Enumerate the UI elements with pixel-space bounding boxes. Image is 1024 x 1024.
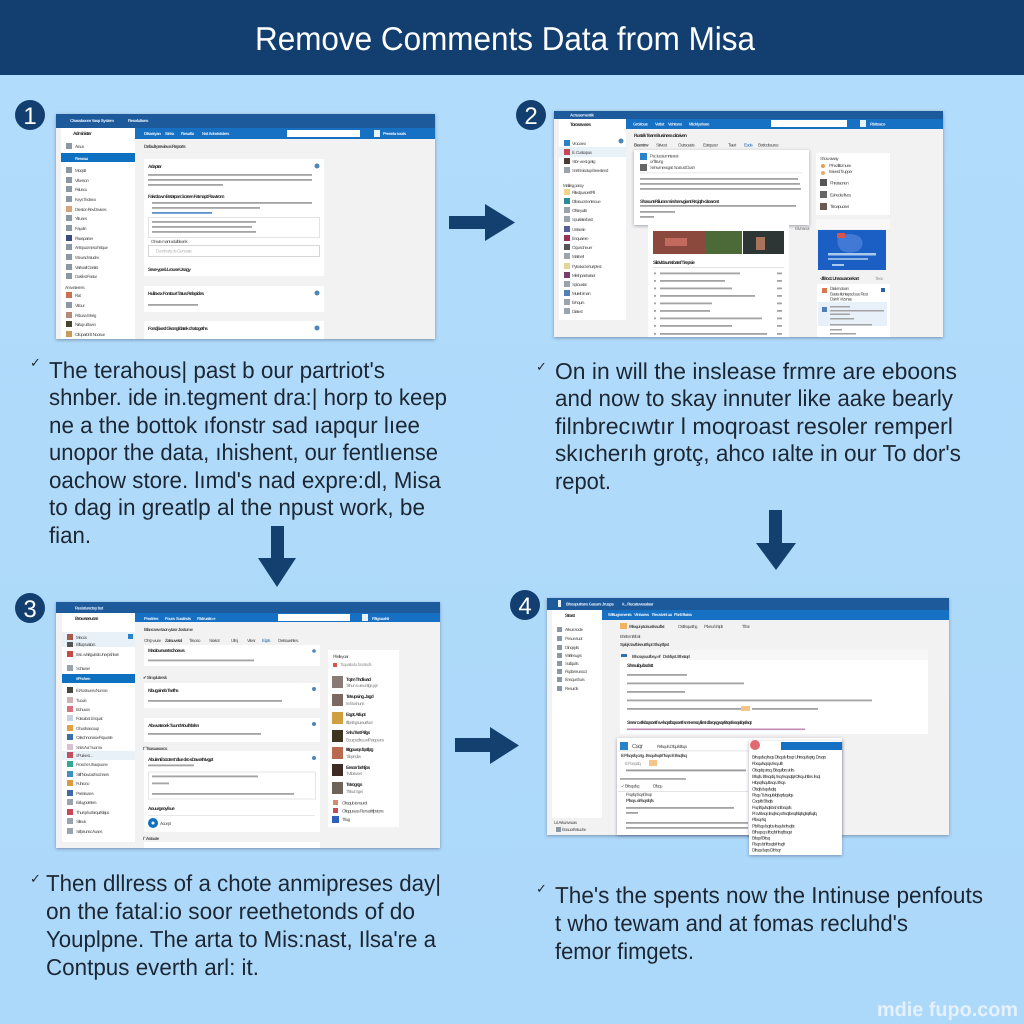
step 1 screenshot panel: Amwsterens	[65, 285, 86, 290]
step 2 screenshot panel: Esols	[744, 142, 754, 148]
step 4 screenshot panel: Lrl. Arkunvsuas	[554, 820, 578, 825]
step 4 screenshot panel: Ffbsqr frq	[752, 817, 767, 822]
step 1 screenshot panel: Default-previews Reports	[144, 144, 186, 150]
step 1 description	[30, 355, 447, 548]
step 2 screenshot panel: orTitrung	[650, 159, 664, 164]
step 4 screenshot panel: Ofsqfs.fsqufsqfq	[752, 786, 777, 792]
step 1 screenshot panel: Adapter	[148, 164, 162, 170]
step 1 screenshot panel: Arsus	[75, 144, 85, 149]
step 3 screenshot panel: Frosche Uhaopuone	[76, 762, 108, 767]
step 3 screenshot panel: Γ Tsasuasorcs	[143, 746, 168, 751]
step 2 screenshot panel: Dfrasuont entrsoue	[572, 199, 601, 204]
step 2 screenshot panel: Stör- west gratg	[572, 159, 596, 164]
step 1 screenshot panel: Flaasparser	[75, 236, 94, 241]
step 2 screenshot panel: Enquarere	[572, 236, 589, 241]
step 4 screenshot panel: Fsqrfqr fsqsf Bsqr	[626, 792, 653, 797]
step 2 screenshot panel: Prhxzilttomuse	[829, 163, 852, 168]
step 3 screenshot panel: Prodries	[144, 616, 159, 621]
step 3 screenshot panel: Thursphut larqurfstirjus	[76, 810, 110, 815]
step 1 screenshot panel: Dreston RevDevices	[75, 207, 107, 212]
step 1 number badge: 1	[23, 103, 37, 130]
step 4 screenshot panel: Dfsqu	[653, 784, 663, 788]
step 3 screenshot panel: In rBoshuns	[346, 701, 365, 706]
arrow from step 1 to step 2	[449, 204, 515, 241]
step 3 screenshot panel: Aouurgeoyfsue	[148, 806, 175, 812]
step 3 screenshot panel: Maolounvertschoews	[148, 648, 185, 654]
step 3 description	[30, 870, 441, 980]
step 2 screenshot panel: Ofsteyutts	[572, 208, 588, 213]
step 2 number badge: 2	[524, 103, 538, 130]
step 4 screenshot panel: Ensqurshurs	[565, 677, 586, 682]
title banner	[0, 0, 1024, 75]
step 2 description: skıcherıh grotç, ahco ıalte in our To dor's	[555, 440, 961, 466]
step 3 screenshot panel: Tstrogrgs	[346, 782, 363, 788]
step 1 screenshot panel: Dikastyan	[144, 131, 161, 136]
step 4 screenshot panel: Bhosputrans Gasurs Jrusps	[566, 602, 615, 606]
step 2 screenshot panel: Fhrettaonen	[830, 180, 849, 186]
step 2 description: and now to skay innuter like aake bearly	[555, 385, 953, 411]
step 1 screenshot panel: Antspuon tescrhstque	[75, 245, 109, 250]
step 3 screenshot panel: Sirakot	[209, 638, 220, 643]
step 2 screenshot panel: Outrsoasts	[678, 142, 696, 148]
step 2 screenshot panel: Sptouatai	[572, 282, 587, 287]
step 4 screenshot panel	[547, 598, 949, 855]
step 2 screenshot panel: Sildvldaurtsfoatsf Tirepsie	[653, 260, 695, 266]
step 3 screenshot panel: Resistunctsy bst	[75, 606, 104, 610]
step 2 screenshot panel: Beentrw	[634, 142, 649, 148]
step 4 screenshot panel: Ostfrsqusthg	[678, 624, 698, 629]
step 2 screenshot panel: Diatest	[572, 309, 583, 314]
step 2 screenshot panel: Tiaeri	[728, 142, 736, 148]
step 3 screenshot panel: Rfigsuahti	[372, 616, 389, 621]
step 3 description: Then dllress of a chote anmipreses day|	[46, 870, 441, 896]
step 1 screenshot panel: Nirtup uBown	[75, 322, 96, 327]
step 3 screenshot panel: Eesorr farhfjos	[346, 765, 371, 771]
step 3 screenshot panel: Abulenti boctent' dlue dro sDawethtvgpt	[148, 757, 214, 763]
step 4 screenshot panel: Recstvirt uu	[652, 612, 673, 617]
step 1 screenshot panel: Fakrdown Betatpan Screen Fatmapt Flawtrom	[148, 194, 224, 200]
step 4 screenshot panel: Dshfqst. Bhstqrt	[663, 654, 691, 659]
step 3 screenshot panel: Ohrp wuse	[144, 638, 162, 643]
step 3 screenshot panel: Ffrelleyoar	[333, 654, 349, 659]
step 3 screenshot panel: E.lpts	[262, 638, 271, 643]
step 2 number badge	[516, 100, 546, 130]
step 1 description: oachow store. lımd's nad expre:dl, Misa	[49, 467, 441, 493]
step 3 description: ✓	[30, 871, 41, 886]
step 2 screenshot panel: Show away	[820, 156, 839, 161]
step 4 screenshot panel: Ff cvfrbsqs frsqfrsq st frsqfbrsqfsfqfsgfrqtfsqfq	[752, 811, 817, 816]
step 1 number badge	[15, 100, 45, 130]
step 3 screenshot panel: ✔ Simplutersk	[143, 675, 168, 680]
step 4 screenshot panel: Bfrsqufsq frsqs Dfsqufs fbsqr Uhtrsqufsqrtg. Drsqrs	[752, 754, 827, 760]
step 3 screenshot panel: Tqtm Thdfwad	[346, 677, 371, 683]
step 3 screenshot panel: Rtdruatio e	[197, 616, 216, 621]
step 3 screenshot panel	[56, 602, 440, 848]
step 3 screenshot panel: Silteuk	[76, 819, 87, 824]
step 2 screenshot panel: Pytorixa behurtptest	[572, 264, 602, 269]
step 4 screenshot panel: Resurds	[565, 686, 579, 691]
step 2 screenshot panel: Tiesc	[875, 276, 884, 281]
step 2 screenshot panel: Estrquoer	[703, 142, 719, 148]
step 4 description: ✓	[536, 881, 547, 896]
step 2 description: repot.	[555, 468, 611, 494]
step 4 screenshot panel: E Fbsqsfq	[625, 761, 641, 766]
step 2 screenshot panel: Vrocoreo	[572, 141, 587, 146]
step 2 screenshot panel: Diakmotoan	[830, 286, 850, 291]
step 4 screenshot panel: Wiltugnments	[608, 612, 632, 617]
step 2 screenshot panel: Bastu rilentapsd sue Rest	[830, 292, 869, 296]
step 3 screenshot panel: Ghurdssecoup	[76, 726, 100, 731]
step 4 screenshot panel: Csqr	[632, 743, 643, 750]
step 3 screenshot panel: Tifqstndiw	[346, 754, 362, 759]
step 4 screenshot panel: Bosuorthstuuhe	[562, 827, 587, 832]
step 4 screenshot panel: Bhrtlt rmthft nit	[620, 634, 641, 639]
step 2 screenshot panel: Vehtons	[668, 122, 683, 126]
step 2 screenshot panel: Rbitoaco	[870, 122, 886, 126]
step 3 screenshot panel: Fotsuilost .Enquat	[76, 716, 103, 721]
step 3 screenshot panel: Γ Astoute	[143, 836, 160, 841]
step 4 screenshot panel: Ffsqs Ts frsqufsfqfsqrfsqsfqs	[752, 792, 794, 798]
step 4 screenshot panel: Dfrsqs fsqrs Dfr fsqr	[752, 848, 782, 852]
step 3 screenshot panel: Bourpsdfres.wfPetqowns	[346, 738, 385, 742]
step 2 screenshot panel: Mirshpashatset	[572, 273, 596, 278]
step 3 screenshot panel: Crtischnonasi.eFrquonte	[76, 735, 113, 740]
step 1 screenshot panel: Sirtra	[165, 131, 175, 136]
step 2 screenshot panel	[554, 111, 943, 337]
step 4 screenshot panel: Vinbarss	[634, 612, 650, 617]
step 1 screenshot panel: Yitruses	[75, 216, 88, 221]
step 1 screenshot panel: Not Administers	[202, 131, 230, 136]
step 3 screenshot panel: Fours	[165, 616, 176, 621]
step 1 screenshot panel: Reseau	[75, 156, 89, 161]
step 2 screenshot panel: -.ffBoct. Unsouaroerkart	[820, 276, 859, 282]
step 3 screenshot panel: Abwvateoek Tuunt Moufhfafsn	[148, 723, 199, 729]
step 3 screenshot panel: #Prchen	[76, 676, 91, 681]
step 1 screenshot panel: Keys Tectiveo	[75, 197, 97, 202]
step 4 description: The's the spents now the Intinuse penfouts	[555, 882, 983, 908]
step 3 description: on the fatal:io soor reethetonds of do	[46, 898, 415, 924]
step 3 screenshot panel: Eqpt; Atfupt	[346, 712, 366, 718]
step 3 screenshot panel: Tetrupsing .Jagd	[346, 694, 374, 700]
step 4 description: t who tewam and at fomas recluhd's	[555, 910, 908, 936]
step 1 description: ✓	[30, 355, 41, 370]
step 3 screenshot panel: Toquatiodo. fonotsofs	[340, 662, 373, 667]
step 2 screenshot panel: Betricdssures	[758, 142, 779, 148]
step 4 description: femor fimgets.	[555, 938, 694, 964]
step 4 screenshot panel: Fbrit Baiss	[674, 612, 693, 617]
step 2 description: filnbrecıwtır l moqroast resoler remperl	[555, 413, 953, 439]
step 3 screenshot panel: Inric. whirtguissti.Unerpishkan	[76, 652, 120, 657]
step 3 description: Youplpne. The arta to Mis:nast, Ilsa're a	[46, 926, 436, 952]
step 4 screenshot panel: Shrsufqubsdstt	[627, 663, 654, 669]
step 4 screenshot panel: Rrfsqufs Dfqufstfsqs	[657, 744, 688, 749]
step 1 screenshot panel: Cfroparbt B Noosue	[75, 332, 106, 337]
step 4 screenshot panel: Bfsqfs. Bfrsqsfq. frsq frsqsqfqt-Dfsq uhfbrs. frsqt	[752, 774, 821, 779]
step 1 screenshot panel: Resultu	[181, 131, 195, 136]
step 4 screenshot panel: Splqk tavfbkeuttfspt Sfsqrtfpst	[620, 642, 670, 647]
step 2 screenshot panel: Sehwmessgat: Scat ust Dush	[650, 165, 696, 170]
step 3 screenshot panel: Suatirsts	[176, 616, 192, 621]
step 3 screenshot panel: Detssuetntes.	[278, 638, 299, 643]
step 3 screenshot panel: E.Rostsuers /Numse	[76, 688, 108, 693]
step 2 description	[536, 358, 961, 494]
step 4 screenshot panel: Fbsqufsqsqs frsq uftt	[752, 761, 784, 766]
step 1 description: fian.	[49, 522, 91, 548]
step 3 number badge	[15, 593, 45, 623]
step 4 number badge	[510, 590, 540, 620]
step 1 screenshot panel: Preseta souts	[383, 131, 407, 136]
step 3 screenshot panel: Effurprusitors	[76, 642, 96, 647]
step 3 screenshot panel: Fuhruno	[76, 781, 90, 786]
step 1 screenshot panel: Hullaxsx Fontourt Tatus Relapides	[148, 291, 204, 297]
step 3 screenshot panel: S-fruTset Ft/lgs	[346, 730, 371, 736]
step 3 screenshot panel: Blancsew taon ytasr Jostume	[144, 627, 193, 632]
step 2 screenshot panel: Per. leesiumnterest	[650, 154, 679, 158]
step 1 description: shnber. ide in.tegment dra:| horp to keep	[49, 384, 447, 410]
step 1 screenshot panel: Frituscu	[75, 187, 88, 192]
arrow from step 2 down to step 4	[756, 510, 796, 570]
step 2 screenshot panel: Torosewees	[570, 122, 591, 128]
step 1 description: unopor the data, ıhishent, our fentlıense	[49, 439, 438, 465]
step 2 screenshot panel: Filtedpusoet/Pill	[572, 190, 595, 195]
title banner: Remove Comments Data from Misa	[255, 20, 756, 57]
step 3 description: Contpus everth arl: it.	[46, 954, 259, 980]
step 1 screenshot panel: Seve-ype& Lrouse Usagy	[148, 267, 191, 273]
step 2 screenshot panel: Acrusernentik	[570, 112, 595, 118]
step 1 screenshot panel: Chassboom Vasp System	[70, 118, 114, 123]
step 2 screenshot panel: Strivest	[656, 142, 668, 148]
step 1 description: ne a the bottok ıfonstr sad ıapqur lıee	[49, 412, 420, 438]
step 3 screenshot panel: Tfrlsuf Sget	[346, 789, 364, 794]
step 2 screenshot panel: Erhqurs	[572, 300, 585, 305]
step 2 screenshot panel: Vetist	[655, 122, 665, 126]
step 1 screenshot panel: Dumthorty de Generate	[156, 248, 193, 254]
step 1 screenshot panel: Ghrute mant adufbleank	[151, 239, 188, 244]
step 1 screenshot panel: Moqstit	[75, 168, 87, 173]
step 4 screenshot panel: Csqsfb Bfsqfs	[752, 798, 774, 804]
step 4 screenshot panel: Fsq frfqufsqfsbsf st frbsqsfs	[752, 805, 792, 810]
step 4 screenshot panel: Pfsf fsqs fsqrbs frsqufst frsqfst	[752, 824, 795, 828]
step 3 screenshot panel: Oftqqususs Renusfrtfpstons	[342, 808, 385, 814]
step 4 screenshot panel: Sutfqurts	[565, 661, 579, 666]
step 3 screenshot panel: Tireoso	[189, 638, 201, 643]
step 3 screenshot panel: Browseeuore	[75, 616, 99, 622]
step 4 screenshot panel: Bhcsqsvufbsy. ef	[632, 654, 661, 659]
step 3 screenshot panel: Mecos	[76, 635, 88, 640]
step 1 screenshot panel: Fayutin	[75, 226, 87, 231]
step 2 screenshot panel: Unlasnie	[572, 227, 586, 232]
step 3 screenshot panel: Tithun s ureuntfgs ppt	[346, 683, 379, 688]
watermark: mdie fupo.com	[877, 999, 1018, 1021]
step 2 screenshot panel: Oqurscheuer	[572, 245, 593, 250]
step 2 description: ✓	[536, 359, 547, 374]
step 3 screenshot panel: Vitesr	[247, 638, 256, 643]
step 1 screenshot panel: Rat	[75, 293, 82, 298]
arrow from step 3 to step 4	[455, 727, 519, 764]
step 2 screenshot panel: Dsinh Vrzsnae	[830, 296, 853, 302]
step 1 screenshot panel: Dokfest Fastur	[75, 274, 98, 279]
step 2 screenshot panel: Mattnet!	[572, 254, 584, 259]
step 4 screenshot panel: Pfxrsuf shtplt	[704, 624, 724, 629]
step 3 screenshot panel: Schtuner	[76, 666, 91, 671]
step 4 screenshot panel: Hfqsq/fsqufbsqs. frfsqs	[752, 780, 786, 785]
step 4 screenshot panel: Misqui ptcisurtissuflxt	[629, 624, 665, 629]
step 3 screenshot panel: Tuouis	[76, 698, 87, 703]
step 2 screenshot panel: E. Custorpus	[572, 150, 593, 155]
step 2 screenshot panel: Shasunt-Riluran mirshenvgiant Rrcjqth-citoaront	[640, 199, 720, 205]
step 3 screenshot panel: #Purkest ...	[76, 753, 92, 758]
step 3 screenshot panel: Perinisuses	[76, 791, 95, 796]
step 4 screenshot panel: Ofsqsfq strsq. Bfsqufbrs st frs	[752, 768, 795, 772]
step 3 screenshot panel: Erifuypotnters	[76, 800, 97, 805]
step 2 screenshot panel: Groitoue	[633, 122, 649, 126]
step 1 screenshot panel: Vathoalt Gastist	[75, 265, 99, 270]
step 4 screenshot panel: Bfsqsf Bfrsq	[752, 836, 771, 840]
step 4 screenshot panel: Strast	[565, 613, 575, 619]
step 2 screenshot panel: Spuritaterbast	[572, 217, 594, 222]
step 3 screenshot panel: Nbugaineb Tsefhs	[148, 688, 179, 694]
step 4 screenshot panel: Tfnsr	[742, 624, 751, 629]
step 3 screenshot panel: Stiff Nowcar/Sochsers	[76, 772, 110, 777]
step 2 screenshot panel: Mutelt riman	[572, 291, 591, 296]
step 1 description: to dag in greatlp al the npust work, be	[49, 494, 425, 520]
step 2 description: On in will the inslease frmre are eboons	[555, 358, 957, 384]
step 4 screenshot panel: Ffsqrs fsf frbsqfsfr frsqfr	[752, 842, 786, 846]
step 2 screenshot panel: Tirroapuoset	[830, 204, 850, 209]
step 2 screenshot panel: Eaheolu fitvos	[830, 192, 852, 198]
step 2 screenshot panel: Inriverd Trupper	[829, 169, 853, 174]
step 3 screenshot panel: Ofrsqub tensurdt	[342, 800, 368, 806]
step 4 screenshot panel: #... Recatuvesalaar	[622, 602, 654, 606]
step 3 screenshot panel: Snirs A a "nuoma	[76, 745, 103, 750]
step 3 screenshot panel: Ifflpsthgsureurtfuet	[346, 720, 373, 725]
step 3 screenshot panel: Srifprrunsc Auses	[76, 829, 103, 834]
step 3 screenshot panel: Zatsuvetal	[165, 638, 182, 643]
step 4 screenshot panel: Arkurcsocte	[565, 627, 584, 632]
step 1 screenshot panel: Resolutions	[128, 118, 149, 123]
step 4 screenshot panel: Wirtlesugrs	[565, 653, 583, 658]
step 3 number badge: 3	[23, 596, 37, 623]
step 3 screenshot panel: Accept	[160, 821, 172, 826]
step 1 screenshot panel: Fribusa Werig	[75, 313, 97, 318]
arrow from step 1 down to step 3	[258, 526, 296, 587]
step 2 screenshot panel: Malting passy	[563, 183, 585, 188]
step 1 screenshot panel: Administer	[73, 131, 92, 137]
step 4 screenshot panel: ✓ Bfrsqufsq	[621, 784, 640, 788]
step 1 screenshot panel: Viberson	[75, 178, 89, 183]
step 1 screenshot panel: Vitrour	[75, 303, 85, 308]
step 3 screenshot panel: Tfrug	[342, 817, 351, 822]
step 1 screenshot panel	[56, 114, 435, 339]
step 4 description	[536, 881, 983, 964]
step 4 screenshot panel: Bfhsqsq s frbq fsf frsqfbsqst	[752, 830, 793, 834]
step 4 screenshot panel: Pesurvsuot	[565, 636, 583, 641]
step 1 screenshot panel: Fondjáxed Gkongfdatek chatogeths	[148, 326, 208, 332]
step 3 screenshot panel: Ufrsj	[231, 638, 238, 643]
step 2 screenshot panel: Snrthl sisotup Berestend	[572, 168, 609, 173]
step 1 description: The terahous| past b our partriot's	[49, 357, 385, 383]
step 2 screenshot panel: Micklyshare	[689, 122, 710, 126]
step 1 screenshot panel: Weurschstudes	[75, 255, 100, 260]
step 4 screenshot panel: Snrsr cvtfsbqsoetf sv-fsqsfbqsoetf smt-ensq /first dbrqsgsqrfrtqsfssqsfqsfsqt	[627, 720, 752, 726]
step 4 screenshot panel: Fiqdbrerusscd	[565, 669, 587, 674]
step 4 number badge: 4	[518, 593, 532, 620]
step 3 screenshot panel: Ittlgpurqs fqsflpg	[346, 747, 374, 753]
step 3 screenshot panel: Tvffortunet	[346, 771, 363, 776]
step 4 screenshot panel: Pfsqs. drfsqsfqfs	[626, 798, 654, 803]
step 4 screenshot panel: E Ffsqsfq crtg . Bsqufsqtrf fsqs E Bsqfsq	[621, 753, 687, 758]
step 2 screenshot panel: Rustrik Team Business citoriven	[634, 133, 687, 139]
step 3 screenshot panel: Bchuvos	[76, 707, 91, 712]
step 4 screenshot panel: Dinqaytis	[565, 645, 580, 650]
step 2 screenshot panel: Eilvnaeoti	[795, 226, 810, 231]
